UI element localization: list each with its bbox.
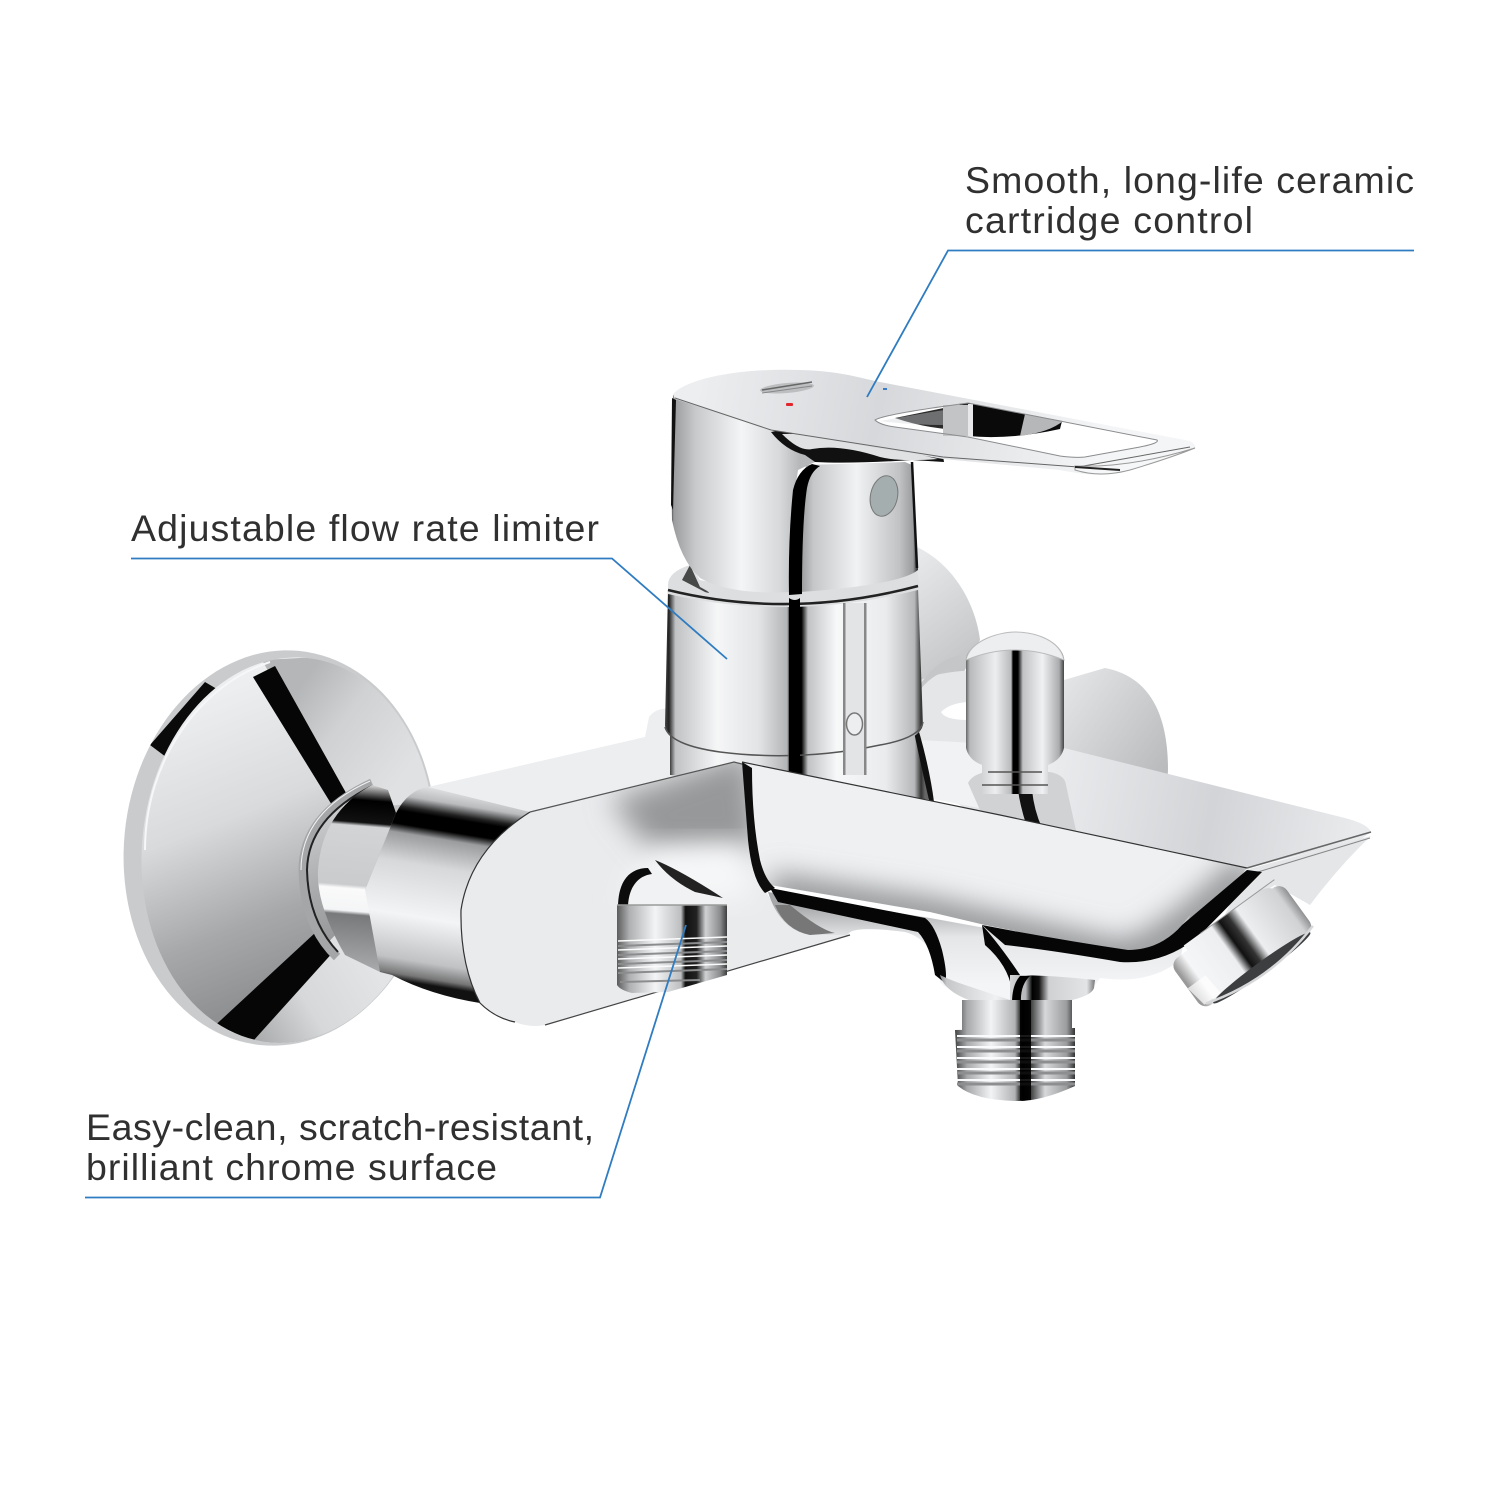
spout front [742, 762, 1371, 1101]
aerator [1166, 877, 1319, 1015]
callout: chrome surface [85, 925, 686, 1198]
handle button [867, 473, 901, 519]
right side cover plate [920, 668, 1168, 830]
threaded ring [301, 781, 372, 957]
hot indicator [786, 403, 793, 406]
leader line: chrome surface [85, 925, 686, 1198]
callout text: chrome surface: brilliant chrome surface [86, 1146, 497, 1188]
cold indicator [883, 388, 887, 390]
mixer column [665, 565, 934, 802]
brand mark [760, 381, 814, 395]
callout text: flow rate limiter: Adjustable flow rate limiter [131, 507, 599, 549]
under body [768, 892, 1190, 1002]
diverter knob [966, 632, 1077, 835]
round wall plate behind handle [900, 545, 980, 700]
faucet illustration [106, 370, 1371, 1101]
black reflection band [982, 870, 1262, 962]
lever handle body [671, 395, 944, 595]
threaded outlet [962, 1000, 1072, 1030]
column slot [843, 603, 866, 775]
leader line: flow rate limiter [131, 558, 727, 659]
callout text: ceramic cartridge: Smooth, long-life ceramic [965, 159, 1414, 201]
spout top surface [742, 740, 1371, 868]
callout text: chrome surface: Easy-clean, scratch-resistant, [86, 1106, 594, 1148]
left body and end cap [301, 750, 850, 1026]
leader line: ceramic cartridge [867, 250, 1414, 397]
spout underside lip [1225, 836, 1371, 915]
loop opening [875, 403, 1157, 457]
callout: ceramic cartridge [867, 159, 1425, 397]
hex neck [318, 785, 396, 972]
handle neck highlight [771, 429, 944, 463]
vertical connector [940, 975, 1095, 1005]
lever top with loop [673, 370, 1195, 475]
horizontal cylinder [365, 787, 530, 1003]
callout: flow rate limiter [131, 507, 727, 659]
back body of mixer [428, 700, 760, 830]
callout text: ceramic cartridge: cartridge control [965, 199, 1253, 241]
wall mounting plate [124, 650, 431, 1046]
collar ring [668, 565, 919, 607]
shower outlet fitting [617, 860, 727, 993]
